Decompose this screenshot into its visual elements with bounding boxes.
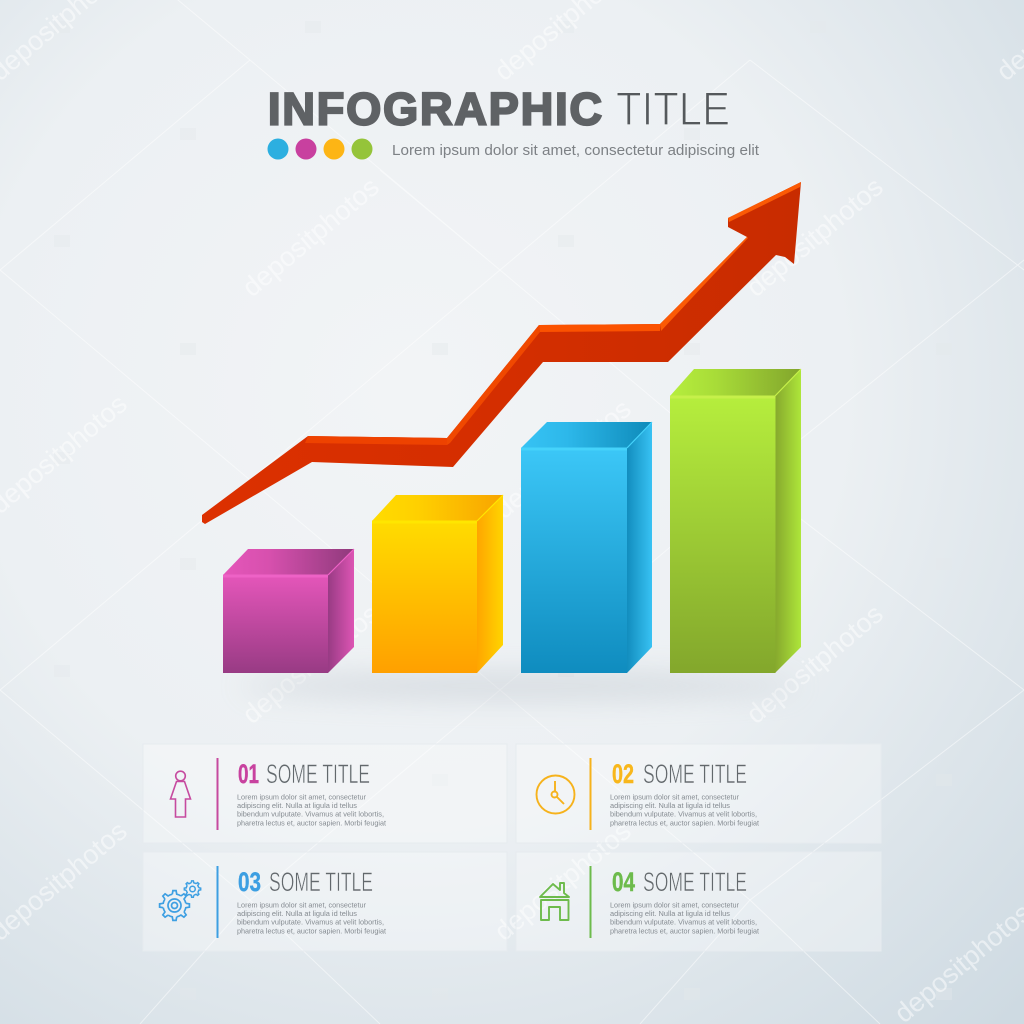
- heading: SOME TITLE: [269, 867, 373, 897]
- divider: [216, 866, 218, 938]
- text block: Lorem ipsum dolor sit amet, consectetur: [610, 900, 740, 910]
- trend arrow: [202, 182, 801, 524]
- icon: person: [170, 771, 190, 817]
- heading: [612, 759, 747, 789]
- text block: pharetra lectus et, auctor sapien. Morbi feugiat: [237, 818, 386, 828]
- heading: 01: [238, 759, 259, 789]
- text block: pharetra lectus et, auctor sapien. Morbi feugiat: [610, 818, 759, 828]
- text block: [237, 900, 386, 936]
- text block: [237, 792, 386, 828]
- heading: 02: [612, 759, 634, 789]
- bar: blue: [521, 422, 652, 673]
- heading: 04: [612, 867, 635, 897]
- bar: pink: [223, 549, 354, 673]
- heading: SOME TITLE: [643, 867, 747, 897]
- panel: 03: [143, 852, 507, 951]
- icon: clock: [536, 776, 574, 814]
- chart shadow: [240, 673, 800, 699]
- text block: pharetra lectus et, auctor sapien. Morbi feugiat: [237, 926, 386, 936]
- text block: [610, 900, 759, 936]
- subtitle: Lorem ipsum dolor sit amet, consectetur adipiscing elit: [392, 143, 759, 159]
- panel: 01: [143, 744, 507, 843]
- heading: SOME TITLE: [643, 759, 747, 789]
- text block: [610, 792, 759, 828]
- watermark pattern: depositphotos: [489, 394, 637, 525]
- panel: 02: [516, 744, 881, 843]
- text block: Lorem ipsum dolor sit amet, consectetur: [237, 792, 367, 802]
- watermark pattern: depositphotos: [489, 816, 637, 947]
- watermark pattern: depositphotos: [741, 172, 889, 303]
- title: TITLE: [616, 82, 730, 135]
- bar chart: [223, 369, 801, 673]
- watermark pattern: depositphotos: [741, 599, 889, 730]
- divider: [590, 758, 592, 830]
- text block: adipiscing elit. Nulla at ligula id tellus: [237, 909, 357, 918]
- panel: 04: [516, 852, 881, 951]
- divider: [216, 758, 218, 830]
- heading: SOME TITLE: [266, 759, 370, 789]
- icon: house: [540, 883, 569, 920]
- heading: [238, 867, 373, 897]
- bar: green: [670, 369, 801, 673]
- text block: bibendum vulputate. Vivamus at velit lobortis,: [237, 918, 384, 926]
- heading: [238, 759, 370, 789]
- title: [268, 82, 730, 135]
- heading: 03: [238, 867, 261, 897]
- watermark pattern: depositphotos: [237, 599, 385, 730]
- text block: bibendum vulputate. Vivamus at velit lobortis,: [237, 810, 384, 818]
- text block: adipiscing elit. Nulla at ligula id tellus: [237, 801, 357, 810]
- text block: adipiscing elit. Nulla at ligula id tellus: [610, 909, 730, 918]
- text block: pharetra lectus et, auctor sapien. Morbi feugiat: [610, 926, 759, 936]
- bar: yellow: [372, 495, 503, 673]
- text block: Lorem ipsum dolor sit amet, consectetur: [237, 900, 367, 910]
- divider: [590, 866, 592, 938]
- watermark pattern: depositphotos: [237, 172, 385, 303]
- colour dots: [268, 138, 372, 160]
- text block: Lorem ipsum dolor sit amet, consectetur: [610, 792, 740, 802]
- title: INFOGRAPHIC: [268, 84, 602, 134]
- icon: gears: [159, 881, 201, 921]
- text block: adipiscing elit. Nulla at ligula id tellus: [610, 801, 730, 810]
- text block: bibendum vulputate. Vivamus at velit lobortis,: [610, 918, 757, 926]
- text block: bibendum vulputate. Vivamus at velit lobortis,: [610, 810, 757, 818]
- heading: [612, 867, 747, 897]
